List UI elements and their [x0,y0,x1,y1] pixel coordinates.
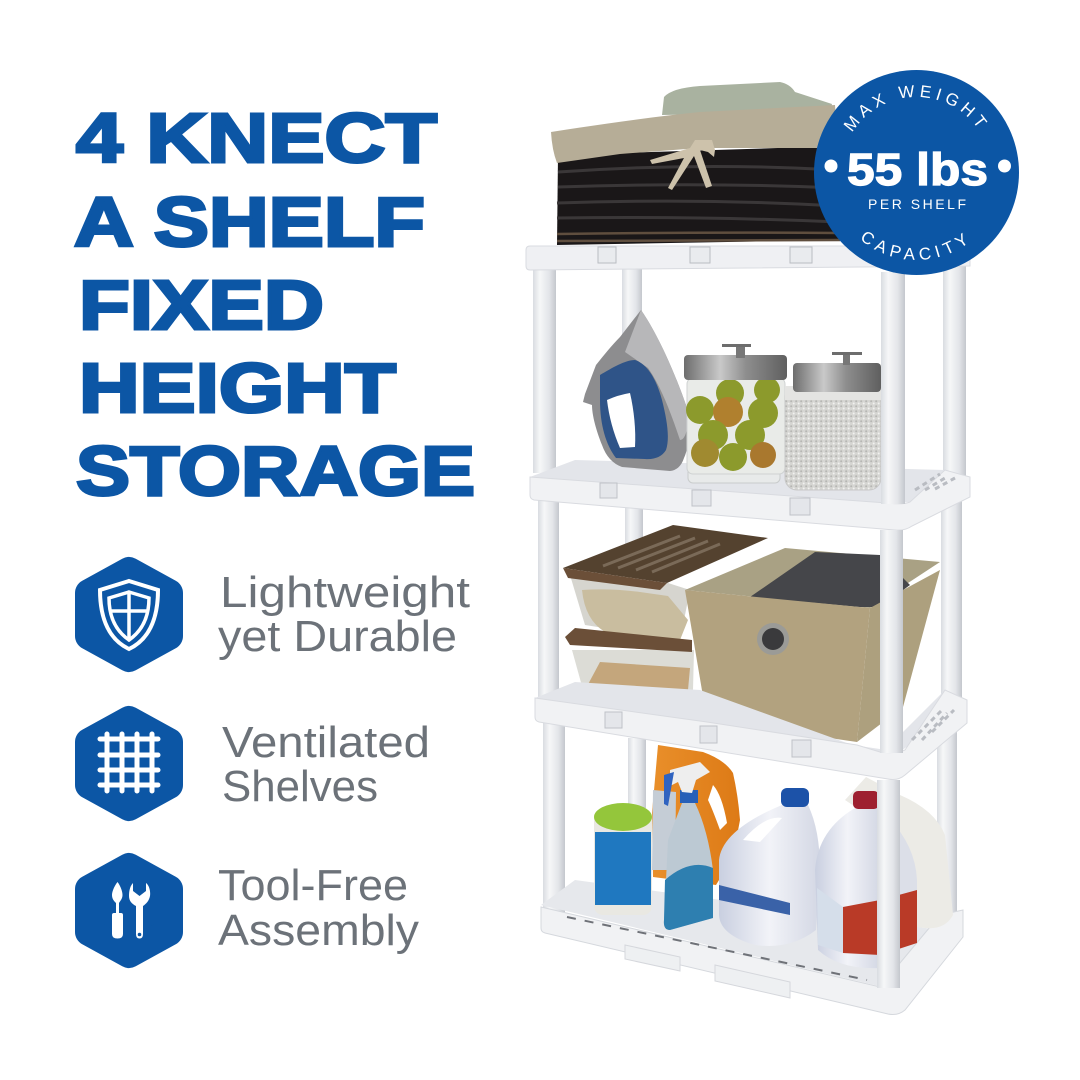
icon: tools [89,867,169,954]
front right posts [877,272,905,988]
second shelf [530,460,970,530]
white jug behind [845,777,953,928]
badge: max weight 55 lbs per shelf capacity [814,70,1019,275]
top shelf [526,246,970,270]
weight value: 55 lbs [847,144,988,195]
label: Assembly [218,906,419,955]
feature: tool-free assembly [89,861,419,955]
glass jar with white granules [785,352,881,490]
label [218,861,419,955]
icon: grid [89,720,169,807]
bottom shelf [541,880,963,1014]
feature: lightweight yet durable [89,568,470,661]
label: yet Durable [218,612,457,661]
glass jar with pears [684,344,787,483]
iron [583,310,689,471]
product: shelving unit with stored items [526,82,970,1014]
wipes canister [594,803,652,915]
per shelf: PER SHELF [868,196,966,212]
label: Lightweight [220,568,470,617]
feature: ventilated shelves [89,718,430,811]
curved text: capacity: CAPACITY [862,232,966,260]
back posts [533,264,966,915]
title: A SHELF [74,183,425,261]
label: Shelves [222,762,378,811]
basket with towel [551,82,840,245]
title: 4 KNECT [76,99,437,177]
label: Tool-Free [218,861,408,910]
tan fabric bin [685,548,940,742]
icon: shield [89,571,169,658]
bullets [824,160,1011,172]
title: STORAGE [76,432,475,510]
third shelf [535,682,967,780]
brown-lid bins [563,525,768,712]
orange detergent bottle [652,745,740,885]
curved text: max weight: MAX WEIGHT [844,85,988,132]
label: Ventilated [222,718,430,767]
label [218,568,470,661]
title: HEIGHT [79,349,396,427]
white jug, blue cap [719,788,820,946]
title [74,99,475,510]
label [222,718,430,811]
spray bottle [664,762,713,930]
title: FIXED [79,266,324,344]
white jug, red cap [815,791,917,968]
